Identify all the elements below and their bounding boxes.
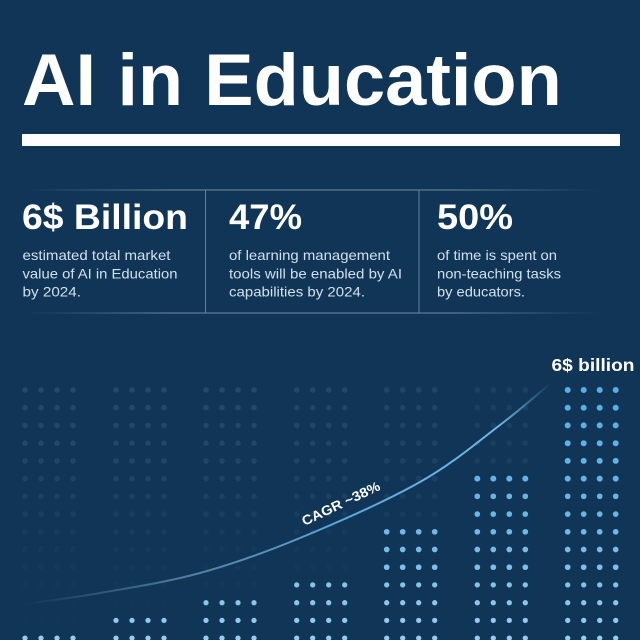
dot column 7 — [568, 390, 616, 638]
stat: non-teaching time: non-teaching tasks — [437, 265, 561, 281]
stat: non-teaching time: 50% — [437, 198, 513, 237]
stat: learning tools: tools will be enabled by AI — [229, 265, 402, 281]
title: AI — [22, 40, 96, 121]
dot column 5 — [387, 390, 435, 638]
stats panel — [22, 190, 600, 314]
title: Education — [204, 40, 562, 121]
stat: learning tools: capabilities by 2024. — [229, 284, 365, 300]
end value label: 6$ billion — [552, 355, 634, 375]
curve label: CAGR ~38% — [299, 479, 383, 529]
dot chart — [25, 390, 616, 638]
growth curve — [25, 383, 551, 604]
stat: market value: 6$ Billion — [22, 198, 188, 237]
stat: market value — [22, 198, 188, 300]
stat: non-teaching time — [437, 198, 561, 300]
dot column 4 — [297, 390, 345, 638]
stat: learning tools: 47% — [229, 198, 302, 237]
stat: learning tools — [229, 198, 402, 300]
stat: learning tools: of learning management — [229, 247, 390, 263]
dot column 1 — [25, 390, 74, 638]
stat: market value: by 2024. — [22, 284, 81, 300]
dot column 6 — [477, 390, 526, 638]
stat: market value: estimated total market — [22, 247, 171, 263]
title — [22, 40, 562, 121]
dot column 2 — [116, 390, 164, 638]
dot column 3 — [206, 390, 254, 638]
title rule — [22, 134, 620, 146]
title: in — [118, 40, 183, 121]
stat: non-teaching time: by educators. — [437, 284, 525, 300]
stat: non-teaching time: of time is spent on — [437, 247, 557, 263]
stat: market value: value of AI in Education — [22, 265, 178, 281]
